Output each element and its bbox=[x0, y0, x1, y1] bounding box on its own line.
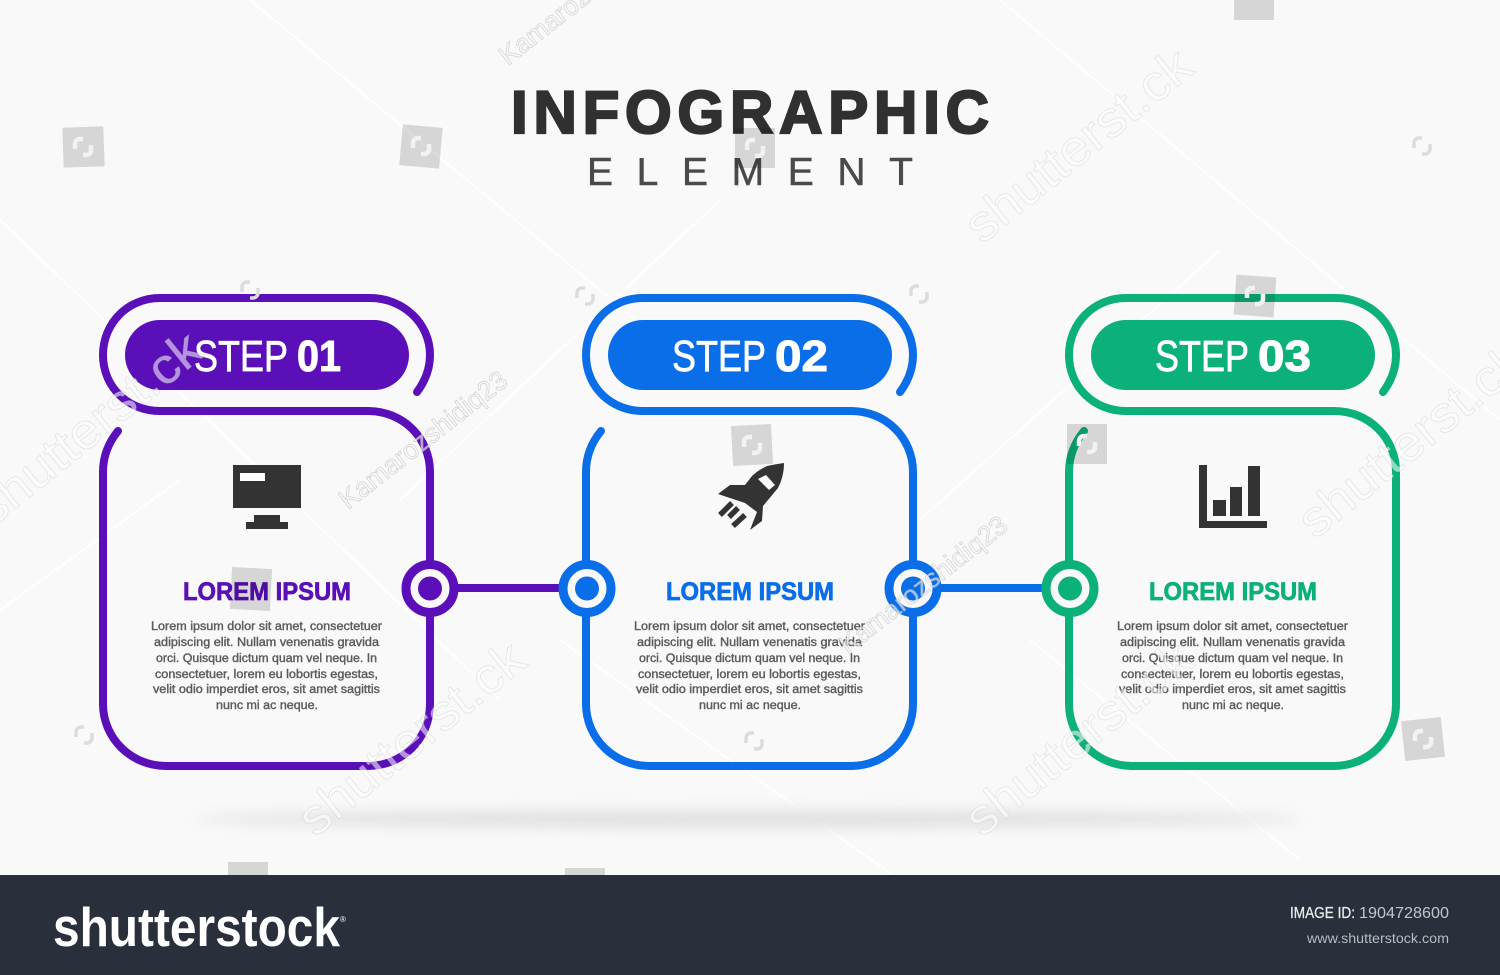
connector: step 01 to step 02 bbox=[406, 564, 611, 612]
step 01 badge: 01 bbox=[297, 332, 341, 381]
step 01 text: nunc mi ac neque. bbox=[216, 700, 318, 712]
connector: step 02 to step 03 bbox=[889, 564, 1094, 612]
step 02 outline bbox=[586, 298, 913, 766]
panel: step 01 bbox=[103, 298, 430, 766]
step 01 badge bbox=[125, 320, 409, 390]
watermark overlay: shutterst.ck bbox=[954, 629, 1203, 847]
step 03 text: orci. Quisque dictum quam vel neque. In bbox=[1122, 653, 1343, 665]
step 01 text: Lorem ipsum dolor sit amet, consectetuer bbox=[151, 621, 382, 633]
step 02 text: adipiscing elit. Nullam venenatis gravida bbox=[637, 637, 863, 649]
step 01 text bbox=[151, 621, 382, 712]
footer registered mark: ® bbox=[340, 915, 346, 924]
step 02 text: orci. Quisque dictum quam vel neque. In bbox=[639, 653, 860, 665]
step 01 text: orci. Quisque dictum quam vel neque. In bbox=[156, 653, 377, 665]
step 03 text: consectetuer, lorem eu lobortis egestas, bbox=[1121, 669, 1344, 681]
icon: monitor bbox=[233, 465, 301, 529]
step 02 text bbox=[634, 621, 865, 712]
step 03 badge: 03 bbox=[1258, 332, 1311, 381]
step 03 text bbox=[1117, 621, 1348, 712]
step 03 text: nunc mi ac neque. bbox=[1182, 700, 1284, 712]
icon: bar chart bbox=[1199, 465, 1267, 528]
title: INFOGRAPHIC bbox=[511, 79, 989, 146]
step 02 badge: 02 bbox=[775, 332, 828, 381]
panel: step 02 bbox=[586, 298, 913, 766]
panel: step 03 bbox=[1069, 298, 1396, 766]
step 01 text: velit odio imperdiet eros, sit amet sagittis bbox=[153, 684, 380, 696]
step 02 text: Lorem ipsum dolor sit amet, consectetuer bbox=[634, 621, 865, 633]
step 02 heading: LOREM IPSUM bbox=[666, 578, 834, 606]
step 01 text: consectetuer, lorem eu lobortis egestas, bbox=[155, 669, 378, 681]
title bbox=[511, 79, 989, 194]
image id number: 1904728600 bbox=[1359, 905, 1449, 922]
step 03 text: adipiscing elit. Nullam venenatis gravida bbox=[1120, 637, 1346, 649]
step 03 heading: LOREM IPSUM bbox=[1149, 578, 1317, 606]
watermark overlay: Kamarozshidiq23 bbox=[833, 510, 1013, 660]
step 03 badge: STEP bbox=[1155, 332, 1249, 381]
watermark overlay: shutterst.ck bbox=[954, 36, 1203, 254]
watermark overlay: Kamarozshidiq23 bbox=[333, 365, 513, 515]
footer logo: shutterstock bbox=[53, 896, 340, 958]
footer bar bbox=[0, 875, 1500, 975]
step 01 text: adipiscing elit. Nullam venenatis gravida bbox=[154, 637, 380, 649]
step 02 text: nunc mi ac neque. bbox=[699, 700, 801, 712]
floor shadow bbox=[193, 810, 1303, 828]
website url: www.shutterstock.com bbox=[1306, 930, 1449, 946]
step 03 text: velit odio imperdiet eros, sit amet sagittis bbox=[1119, 684, 1346, 696]
step 02 text: velit odio imperdiet eros, sit amet sagittis bbox=[636, 684, 863, 696]
step 03 badge bbox=[1091, 320, 1375, 390]
step 02 badge bbox=[608, 320, 892, 390]
icon: rocket bbox=[718, 463, 784, 530]
step 02 text: consectetuer, lorem eu lobortis egestas, bbox=[638, 669, 861, 681]
image id label: IMAGE ID: bbox=[1290, 905, 1355, 922]
step 01 badge: STEP bbox=[194, 332, 288, 381]
step 01 heading: LOREM IPSUM bbox=[183, 578, 351, 606]
step 03 text: Lorem ipsum dolor sit amet, consectetuer bbox=[1117, 621, 1348, 633]
step 01 outline bbox=[103, 298, 430, 766]
title: ELEMENT bbox=[587, 151, 913, 194]
watermark overlay: shutterst.ck bbox=[287, 629, 536, 847]
step 02 badge: STEP bbox=[672, 332, 766, 381]
step 03 outline bbox=[1069, 298, 1396, 766]
